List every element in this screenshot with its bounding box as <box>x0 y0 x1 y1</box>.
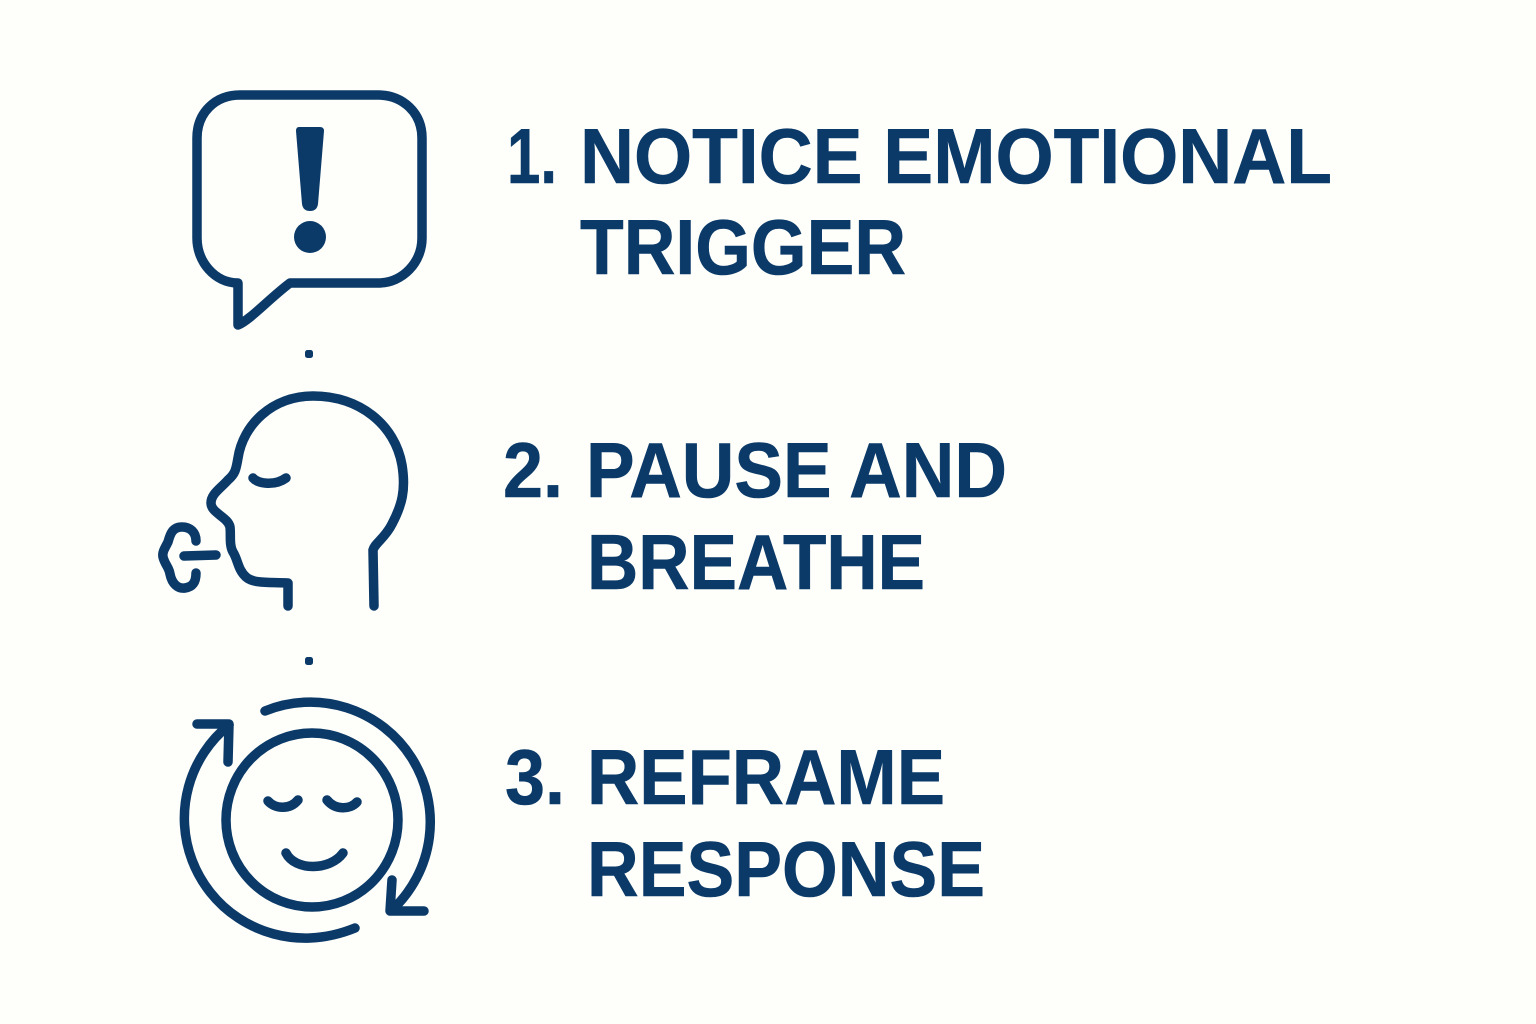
step 1 label: NOTICE EMOTIONAL <box>580 112 1332 200</box>
step 2 label <box>503 426 1007 606</box>
step 1 label: TRIGGER <box>580 203 906 291</box>
icon: head breathing out <box>163 396 404 606</box>
step 2 label: BREATHE <box>587 518 925 606</box>
step 3 label: RESPONSE <box>587 825 985 913</box>
icon: speech bubble with exclamation mark <box>197 95 422 325</box>
icon: calm face with circular arrows <box>184 702 430 938</box>
step 1 label: 1. <box>507 112 557 200</box>
connector dot 1 <box>305 350 313 358</box>
connector dot 2 <box>305 657 313 665</box>
step 2 label: PAUSE AND <box>586 426 1007 514</box>
step 3 label: 3. <box>505 733 565 821</box>
step 3 label <box>505 733 985 913</box>
step 2 label: 2. <box>503 426 563 514</box>
step 3 label: REFRAME <box>587 733 945 821</box>
step 1 label <box>507 112 1332 291</box>
